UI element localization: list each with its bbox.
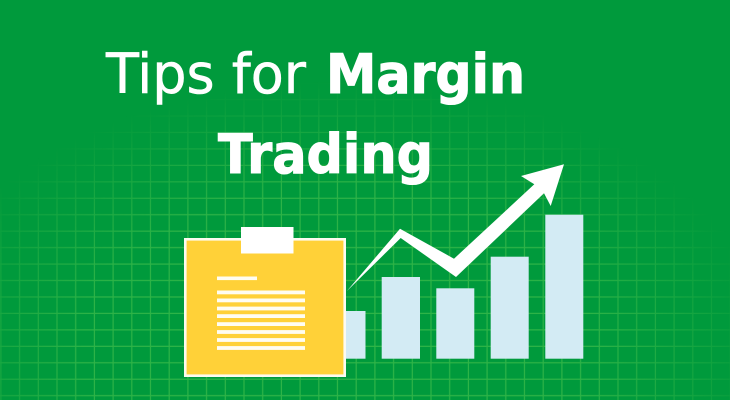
title <box>105 42 525 186</box>
arrow: rising trend <box>347 164 564 291</box>
note heading line <box>217 276 257 280</box>
title line 2: Trading <box>218 123 433 186</box>
yellow sheet <box>185 239 345 376</box>
clipboard note <box>185 227 345 376</box>
title line 1: Margin <box>326 43 525 106</box>
bar chart <box>340 215 583 359</box>
title line 1 <box>105 42 525 106</box>
note text lines <box>217 290 305 350</box>
title line 1: Tips for <box>105 42 306 106</box>
tape <box>241 227 294 254</box>
